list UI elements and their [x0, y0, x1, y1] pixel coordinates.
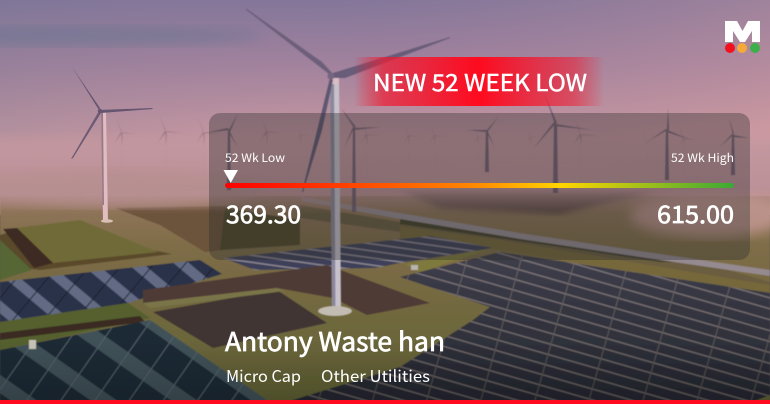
logo letter M [725, 21, 760, 42]
left fields [0, 226, 172, 270]
solar cluster left [0, 260, 222, 322]
bottom red rule [0, 400, 770, 404]
utility hut [411, 265, 418, 270]
company name: Antony Waste han [225, 322, 445, 359]
logo [725, 21, 760, 53]
brown fields [143, 265, 430, 315]
logo red dot [725, 43, 735, 53]
solar right main [280, 252, 770, 404]
panel: 52 week range backdrop [209, 113, 750, 260]
banner heading: NEW 52 WEEK LOW [373, 64, 587, 98]
distant turbines [112, 115, 698, 184]
logo green dot [750, 43, 760, 53]
strips between left clusters [0, 303, 150, 350]
foreground turbine [245, 9, 450, 316]
marker triangle [224, 170, 238, 183]
solar upper middle [223, 236, 493, 270]
logo amber dot [737, 43, 747, 53]
range bar [225, 183, 734, 188]
ground and fields [0, 190, 770, 404]
banner: new 52 week low [354, 57, 604, 106]
river and field lines [300, 205, 770, 290]
far dark field [400, 190, 660, 214]
high value: 615.00 [657, 196, 734, 230]
sector tag: Other Utilities [321, 363, 430, 387]
solar cluster bottom left [0, 320, 267, 404]
low label: 52 Wk Low [225, 150, 285, 166]
market cap tag: Micro Cap [226, 363, 301, 387]
near-mid turbines [205, 93, 749, 212]
utility box [29, 340, 36, 349]
sky [0, 0, 770, 215]
low value: 369.30 [226, 196, 301, 230]
high label: 52 Wk High [671, 150, 734, 166]
mist [0, 130, 770, 214]
foreground turbine left [71, 67, 153, 223]
